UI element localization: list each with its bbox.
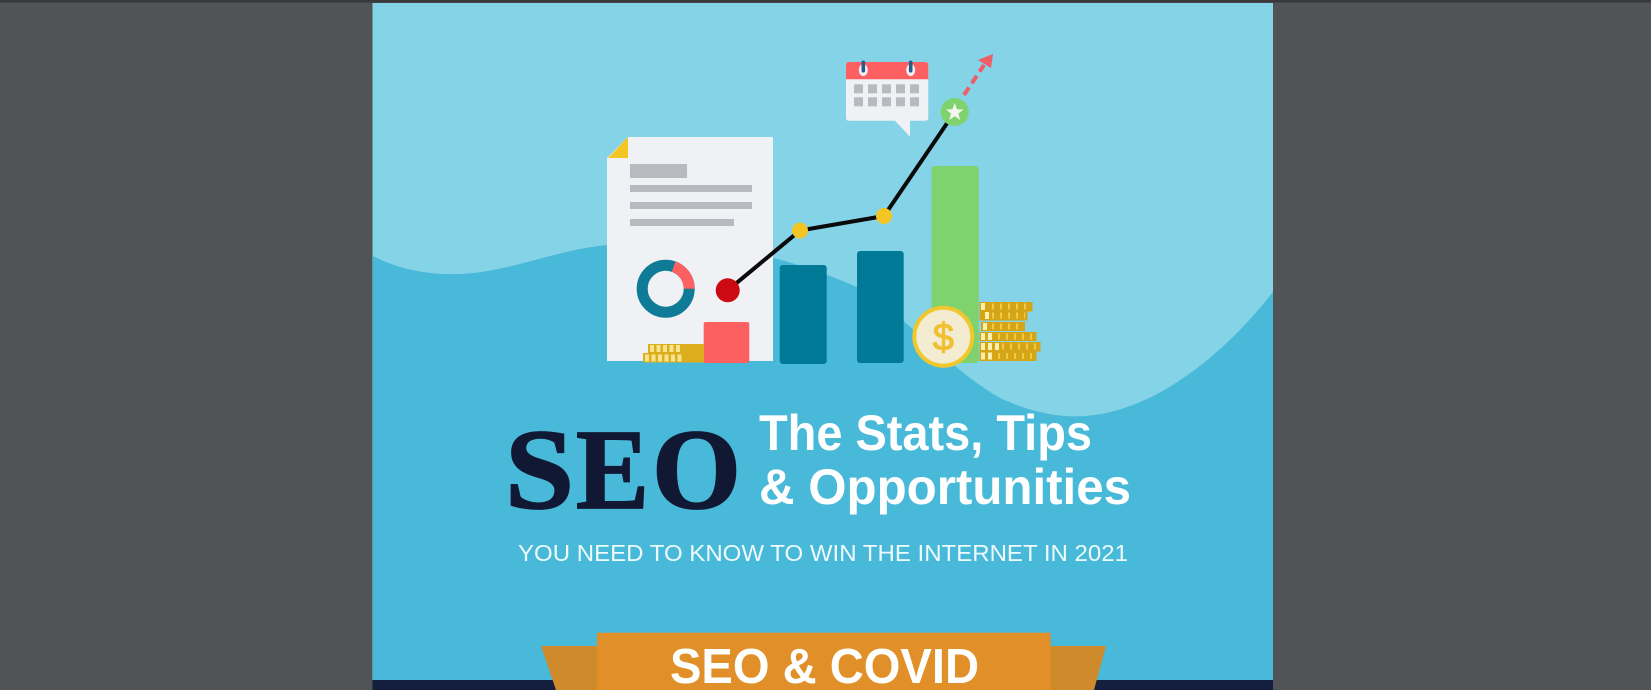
subtitle: YOU NEED TO KNOW TO WIN THE INTERNET IN 2021 bbox=[518, 540, 1128, 566]
donut chart bbox=[642, 265, 689, 312]
gold coin stack: left bbox=[643, 344, 704, 362]
panel: infographic background bbox=[372, 3, 1273, 690]
title: SEO: E bbox=[576, 406, 649, 533]
banner: SEO & COVID bbox=[541, 633, 1106, 690]
icon: calendar speech bubble bbox=[846, 60, 928, 137]
illustration: report and growth chart bbox=[607, 54, 1040, 368]
icon: dollar coin bbox=[912, 306, 974, 368]
icon: dollar coin: $ bbox=[933, 317, 954, 359]
document bbox=[607, 137, 773, 361]
title: SEO bbox=[505, 406, 741, 533]
icon: star marker bbox=[941, 98, 969, 126]
bar chart bbox=[704, 166, 979, 364]
title: SEO: S bbox=[505, 406, 574, 533]
heading: & Opportunities: & Opportunities bbox=[759, 459, 1131, 515]
arrow: dashed growth arrow bbox=[964, 54, 993, 95]
line chart bbox=[716, 112, 955, 302]
heading: The Stats, Tips: The Stats, Tips bbox=[759, 405, 1092, 461]
title: SEO: O bbox=[652, 406, 741, 533]
gold coin stack: right bbox=[980, 302, 1040, 361]
